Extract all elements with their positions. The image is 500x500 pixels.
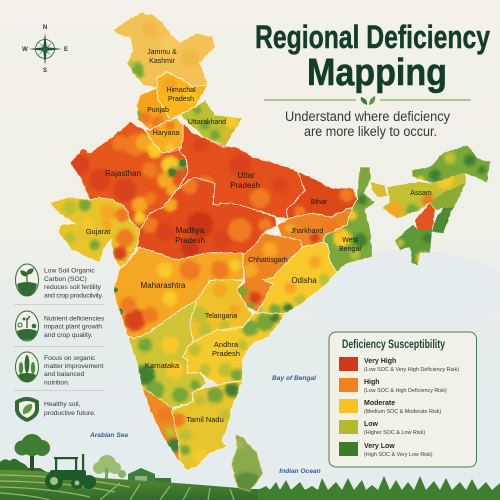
region: Jharkhand: [277, 207, 352, 247]
legend: moderate: (Medium SOC & Moderate Risk): [364, 409, 441, 415]
legend: high: (Low SOC & High Deficiency Risk): [364, 388, 447, 394]
state labels: Odisha: [291, 276, 317, 285]
legend: very low: [339, 442, 433, 458]
region: Meghalaya: [415, 203, 435, 230]
legend title: Deficiency Susceptibility: [342, 339, 445, 351]
legend: very low: (High SOC & Very Low Risk): [364, 452, 433, 458]
state borders: [50, 13, 375, 470]
state labels: Bihar: [311, 199, 328, 206]
region: Karnataka: [128, 300, 207, 408]
region: Bihar: [287, 172, 357, 219]
legend: low: Low: [364, 421, 379, 428]
region: Himachal Pradesh: [157, 72, 208, 118]
state labels: Jammu &: [147, 49, 177, 56]
icon: compass rose: N: [43, 25, 47, 31]
state labels: Kashmir: [149, 58, 175, 65]
region: Tamil Nadu: [171, 380, 243, 470]
item: organic matter improvement: and balanced: [44, 371, 84, 378]
panel: key messages: [14, 264, 105, 422]
item: low soil organic carbon: and crop productivity.: [44, 292, 103, 300]
tractor: [45, 454, 96, 490]
item: low soil organic carbon: reduces soil fertility: [44, 284, 102, 291]
subtitle: are more likely to occur.: [304, 124, 437, 139]
state labels: Pradesh: [230, 181, 260, 190]
subtitle: Understand where deficiency: [285, 109, 450, 124]
item: organic matter improvement: nutrition.: [44, 380, 70, 386]
region: Gujarat: [50, 197, 140, 268]
region: Punjab: [136, 88, 176, 130]
state labels: Assam: [410, 190, 432, 197]
legend: moderate: [339, 399, 441, 415]
state labels: Karnataka: [145, 361, 180, 370]
region: Maharashtra: [112, 247, 243, 338]
region: Uttarakhand: [180, 100, 243, 148]
state labels: Himachal: [166, 87, 196, 94]
state labels: Rajasthan: [105, 169, 141, 178]
icon: compass rose: [22, 25, 68, 74]
item: organic matter improvement: [16, 352, 104, 386]
state labels: Tamil Nadu: [186, 415, 224, 424]
region: Manipur: [432, 208, 453, 233]
state labels: Chhattisgarh: [248, 257, 288, 264]
legend: low: [339, 420, 425, 436]
region: Tripura and Mizoram: [395, 225, 433, 265]
grass: [258, 476, 500, 500]
state labels: Pradesh: [168, 96, 194, 103]
legend: high: High: [364, 379, 380, 386]
legend: very low: Very Low: [364, 443, 395, 450]
state labels: Pradesh: [175, 236, 205, 245]
title: Mapping: [307, 52, 447, 94]
item: nutrient deficiencies: impact plant growth: [44, 324, 102, 330]
region: Chhattisgarh: [237, 233, 303, 312]
legend: low: (Higher SOC & Low Risk): [364, 430, 425, 436]
state labels: Andhra: [214, 340, 239, 349]
divider with leaf icon: [264, 96, 471, 105]
region: Assam: [383, 171, 466, 218]
region: Uttar Pradesh: [177, 123, 305, 219]
region: Haryana: [145, 118, 183, 153]
region: Arunachal Pradesh: [412, 145, 490, 184]
icon: compass rose: W: [22, 47, 28, 53]
item: low soil organic carbon: [16, 264, 103, 300]
item: healthy soil: [15, 397, 96, 422]
state labels: West: [342, 237, 358, 244]
icon: compass rose: S: [43, 68, 47, 74]
state labels: Haryana: [153, 130, 179, 137]
legend: very high: (Low SOC & Very High Deficiency Risk): [364, 367, 459, 373]
state labels: Bengal: [339, 246, 361, 253]
state labels: Pradesh: [212, 349, 240, 358]
icon: compass rose: E: [64, 47, 68, 53]
item: organic matter improvement: matter improvement: [44, 363, 104, 370]
trees and hills: [0, 434, 126, 482]
legend: moderate: Moderate: [364, 400, 395, 407]
legend: high: [339, 378, 447, 394]
item: nutrient deficiencies: and crop quality.: [44, 332, 93, 339]
region: West Bengal: [323, 167, 375, 272]
sea labels: [89, 375, 321, 475]
region: Rajasthan: [70, 122, 188, 230]
region: Kerala: [142, 387, 181, 462]
title: [255, 19, 490, 94]
state labels: Madhya: [176, 226, 205, 235]
state labels: Uttar: [237, 171, 255, 180]
region: Telangana: [190, 280, 253, 342]
subtitle: [285, 109, 450, 139]
state labels: Jharkhand: [291, 228, 323, 235]
region: Sri Lanka: [231, 435, 263, 492]
region: Odisha: [254, 242, 337, 316]
region: Nagaland: [430, 182, 466, 210]
item: healthy soil: productive future.: [44, 410, 96, 417]
item: organic matter improvement: Focus on organic: [44, 355, 96, 362]
state labels: Punjab: [147, 107, 169, 114]
state labels: Telangana: [205, 313, 237, 320]
item: low soil organic carbon: Low Soil Organic: [44, 268, 95, 274]
sea labels: Indian Ocean: [279, 468, 321, 475]
legend: very high: Very High: [364, 358, 396, 365]
item: nutrient deficiencies: [16, 311, 105, 341]
crop field: [0, 470, 500, 500]
region: Madhya Pradesh: [137, 177, 277, 260]
item: healthy soil: Healthy soil,: [44, 401, 81, 408]
state labels: [86, 49, 432, 424]
item: nutrient deficiencies: Nutrient deficiencies: [44, 316, 105, 322]
sea labels: Arabian Sea: [89, 432, 128, 439]
state labels: Uttarakhand: [188, 119, 226, 126]
item: low soil organic carbon: Carbon (SOC): [44, 276, 87, 283]
legend: very high: [339, 357, 459, 373]
state labels: Maharashtra: [141, 281, 186, 290]
region: north Bengal corridor: [371, 182, 387, 197]
sea labels: Bay of Bengal: [272, 375, 316, 382]
farm house: [128, 468, 171, 485]
panel: legend: [329, 332, 476, 467]
region: Andhra Pradesh: [183, 313, 285, 385]
bottom landscape: [0, 434, 500, 500]
region: Jammu and Kashmir: [113, 13, 215, 88]
state labels: Gujarat: [86, 227, 111, 236]
